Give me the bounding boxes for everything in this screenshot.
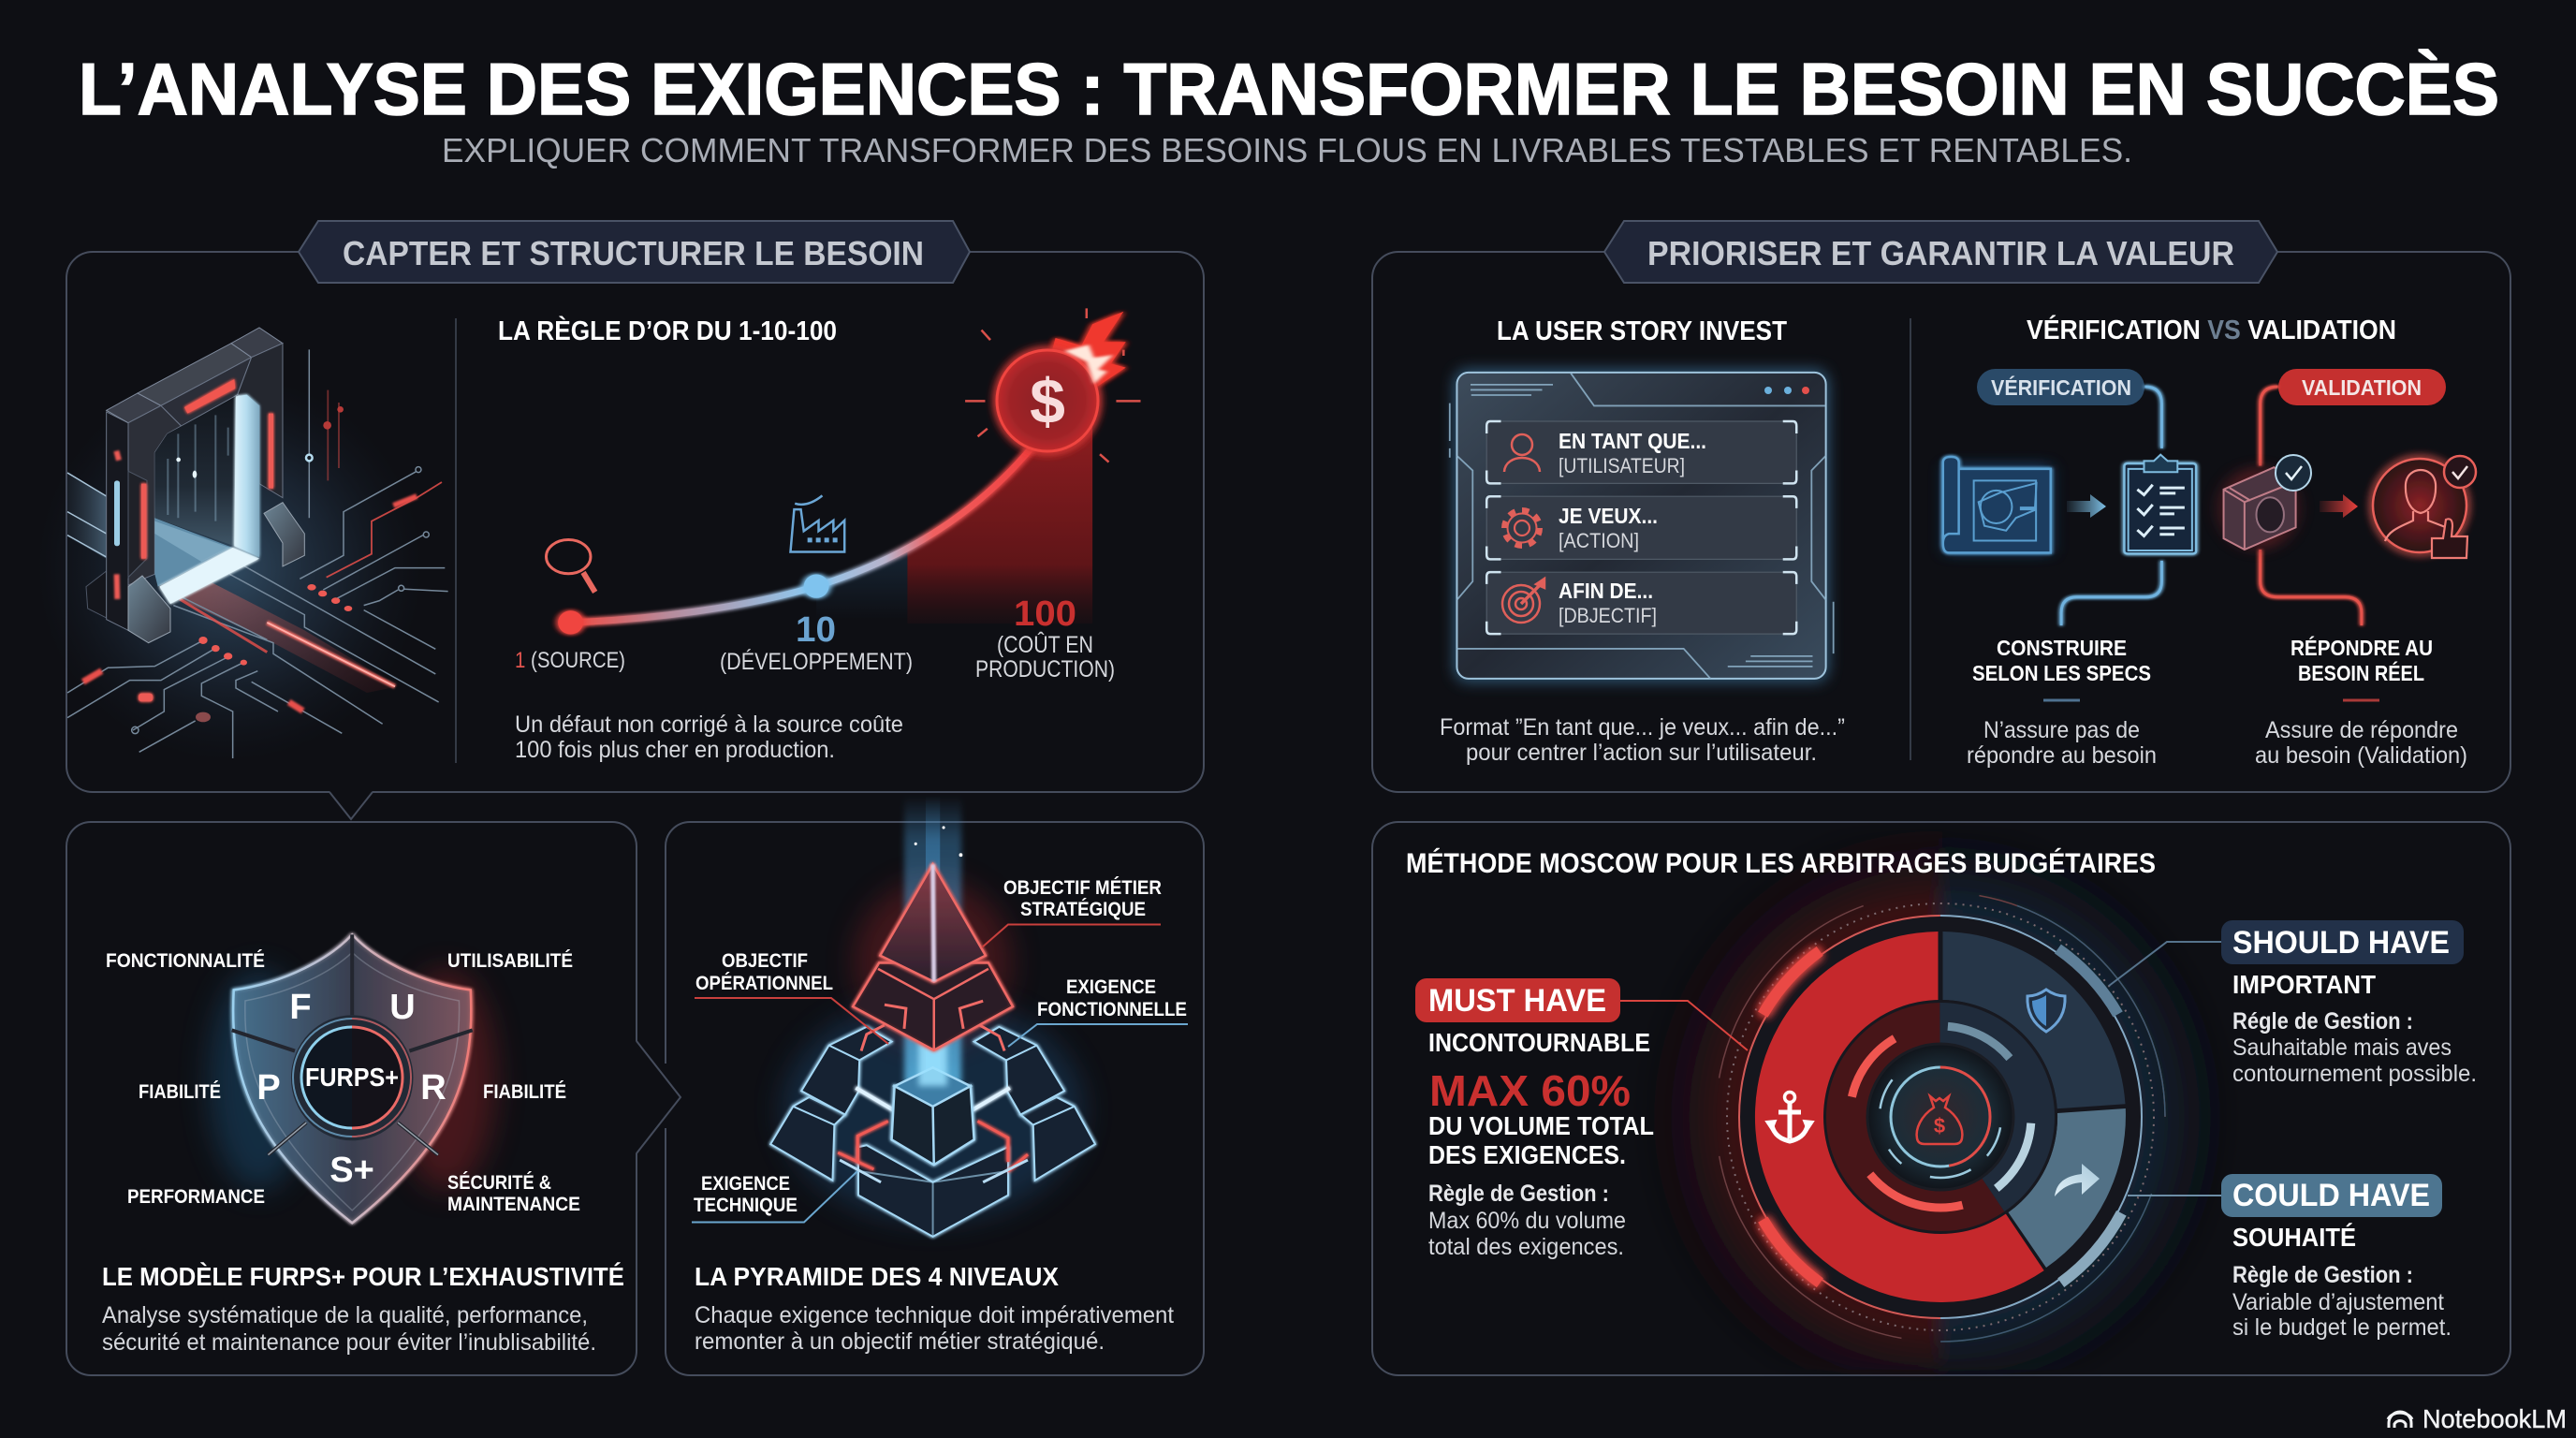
text block: user story caption: Format ”En tant que... je veux... afin de...” [1440,714,1845,741]
label: 100 cout en production [975,594,1115,682]
block: could have [2128,1174,2452,1341]
text: n'assure pas: N’assure pas de [1983,717,2140,743]
panel frame [666,822,1204,1375]
text: construire selon les specs [1972,636,2151,700]
pill: MUST HAVE [1428,983,1606,1019]
label: objectif metier strategique: STRATÉGIQUE [1020,899,1146,920]
shield letters [256,988,446,1190]
big number: MAX 60% [1429,1066,1631,1115]
text block: pyramid description: remonter à un objectif métier stratégiqué. [695,1328,1105,1355]
panel frame [1372,822,2510,1375]
icon: dollar coin explosion [965,308,1141,462]
labels: FURPS categories: UTILISABILITÉ [447,950,573,972]
heading: verification vs validation: VÉRIFICATION VS VALIDATION [2027,314,2396,345]
icon: user [1504,434,1540,472]
row text: en tant que: [UTILISATEUR] [1559,454,1685,477]
text: assure de repondre [2255,717,2467,769]
text block: FURPS description: Analyse systématique de la qualité, performance, [102,1302,588,1328]
segment: should have [1943,932,2125,1108]
illustration: futuristic gate and circuits [37,328,448,761]
outer decorative rings [1716,892,2165,1342]
logo: NotebookLM: NotebookLM [2422,1404,2567,1433]
panel: capter et structurer le besoin [37,221,1204,819]
text: regle: Sauhaitable mais aves [2232,1034,2452,1061]
column: validation [2218,369,2476,769]
labels: FURPS categories: MAINTENANCE [447,1194,580,1215]
shield letters: P [256,1068,281,1108]
halo [1632,829,2243,1370]
text block: FURPS description: sécurité et maintenance pour éviter l’inublisabilité. [102,1329,596,1356]
thumb up [2432,519,2467,558]
block: must have [1415,978,1748,1260]
window dots [1764,387,1809,394]
panel: modele FURPS+ [66,822,681,1375]
text: regle: Régle de Gestion : [2232,1008,2413,1034]
block: should have [2109,920,2477,1087]
label: important: IMPORTANT [2232,970,2376,999]
labels: FURPS categories: SÉCURITÉ & [447,1172,551,1194]
vertical divider [455,318,457,763]
label: exigence fonctionnelle: EXIGENCE [1066,976,1156,998]
title: L’ANALYSE DES EXIGENCES : TRANSFORMER LE BESOIN EN SUCCÈS [79,48,2499,130]
text: n'assure pas: répondre au besoin [1967,742,2157,769]
text block: defect explanation: 100 fois plus cher en production. [515,737,835,763]
heading: pyramide: LA PYRAMIDE DES 4 NIVEAUX [695,1262,1059,1291]
row text: afin de: AFIN DE... [1559,579,1653,603]
section badge: CAPTER ET STRUCTURER LE BESOIN [343,234,924,272]
text block: pyramid description [695,1302,1174,1355]
text: volume total [1428,1111,1654,1169]
row text: je veux: JE VEUX... [1559,504,1658,528]
icon: target [1502,579,1544,623]
labels: FURPS categories: PERFORMANCE [127,1186,265,1208]
icon: blueprint [1943,457,2052,554]
shield letters: FURPS+ [305,1063,399,1092]
column: verification [1943,369,2196,769]
text: repondre au besoin reel: RÉPONDRE AU [2291,635,2433,660]
labels: FURPS categories: FONCTIONNALITÉ [106,950,265,972]
chart: FURPS shield [209,934,495,1223]
segment: could have [2009,1108,2126,1268]
arrow: pointer toward lower panels [329,791,373,819]
heading: FURPS: LE MODÈLE FURPS+ POUR L’EXHAUSTIVITÉ [102,1262,624,1291]
label: exigence fonctionnelle [1008,976,1188,1047]
panel frame [66,822,637,1375]
icon: product cube [2218,467,2298,550]
inner hub [1823,1000,2057,1234]
text: regle de gestion: Max 60% du volume [1428,1208,1626,1234]
icon: dollar coin explosion: $ [1030,366,1065,437]
text block: FURPS description [102,1302,596,1356]
segment: must have 60% [1755,932,2044,1302]
icon: magnifier [547,540,595,592]
heading: la regle d'or: LA RÈGLE D’OR DU 1-10-100 [498,315,837,346]
text block: defect explanation: Un défaut non corrigé à la source coûte [515,712,903,738]
label: objectif operationnel: OBJECTIF [722,950,808,972]
text block: pyramid description: Chaque exigence technique doit impérativement [695,1302,1174,1328]
text: regle: Variable d’ajustement [2232,1289,2444,1315]
connector line [1620,1001,1748,1050]
text: regle: Règle de Gestion : [2232,1262,2413,1288]
label: incontournable: INCONTOURNABLE [1428,1028,1650,1057]
panel frame [1372,252,2510,792]
labels: FURPS categories: FIABILITÉ [139,1081,221,1103]
text: regle [2232,1262,2452,1341]
label: objectif operationnel: OPÉRATIONNEL [695,973,833,994]
label: exigence technique [692,1171,857,1223]
pill: validation [2278,369,2446,405]
icon: shield [2027,990,2065,1032]
text: assure de repondre: Assure de répondre [2265,717,2458,743]
shield letters: U [389,988,416,1027]
section badge [1604,221,2277,283]
text block: user story caption: pour centrer l’action sur l’utilisateur. [1466,740,1817,766]
pill: SHOULD HAVE [2232,925,2450,961]
row text: je veux: [ACTION] [1559,529,1639,552]
text: regle de gestion: Règle de Gestion : [1428,1181,1609,1207]
icon: arrow [2055,1164,2100,1196]
label: 1 source: 1 (SOURCE) [515,648,625,673]
text: repondre au besoin reel: BESOIN RÉEL [2298,660,2424,685]
text block: defect explanation [515,712,903,763]
label: exigence technique: EXIGENCE [701,1173,790,1195]
label: objectif metier strategique [982,877,1162,947]
connectors [2261,387,2362,625]
shield letters: S+ [329,1151,374,1190]
text: volume total: DES EXIGENCES. [1428,1140,1626,1169]
arrow: blueprint to checklist [2067,494,2106,518]
label: objectif metier strategique: OBJECTIF MÉTIER [1003,877,1162,899]
text: regle: contournement possible. [2232,1061,2477,1087]
label: souhaite: SOUHAITÉ [2232,1223,2356,1252]
icon: factory [790,495,844,552]
section badge: PRIORISER ET GARANTIR LA VALEUR [1647,234,2234,272]
text: regle [2232,1008,2477,1087]
text: construire selon les specs: SELON LES SPECS [1972,661,2151,685]
label: 10 developpement: (DÉVELOPPEMENT) [720,648,913,675]
text: repondre au besoin reel [2291,635,2433,700]
text: regle: si le budget le permet. [2232,1314,2452,1341]
chart: isometric pyramid [770,796,1095,1237]
panel frame [66,252,1204,792]
shield letters: F [289,988,312,1027]
label: 100 cout en production: PRODUCTION) [975,656,1115,682]
icon: gear [1504,510,1540,546]
label: 100 cout en production: 100 [1014,594,1076,634]
label: exigence fonctionnelle: FONCTIONNELLE [1037,999,1187,1020]
arrow: cube to client [2320,494,2358,518]
vertical divider [1910,318,1911,760]
text: n'assure pas [1967,717,2157,769]
labels: FURPS categories [106,950,580,1215]
panel: prioriser et garantir la valeur [1372,221,2510,792]
chart: MoSCoW donut [1632,829,2243,1370]
label: 100 cout en production: (COÛT EN [997,631,1093,658]
shield letters: R [420,1068,446,1108]
icon: checklist [2124,455,2196,553]
icon: check badge on cube [2276,455,2311,491]
icon: money bag [1917,1096,1962,1144]
row text: afin de: [DBJECTIF] [1559,604,1657,627]
connectors [2061,387,2161,625]
icon: satisfied client [2373,456,2476,558]
icon: anchor [1766,1092,1813,1141]
text: regle de gestion [1428,1181,1626,1260]
connector line [2128,1195,2221,1196]
section badge [299,221,970,283]
labels: FURPS categories: FIABILITÉ [483,1081,566,1103]
pill: verification: VÉRIFICATION [1991,374,2131,400]
chart: cost curve 1-10-100 [558,427,1092,635]
heading: user story: LA USER STORY INVEST [1497,316,1787,346]
panel: pyramide des 4 niveaux [666,796,1204,1375]
pill: COULD HAVE [2232,1178,2430,1213]
card: user story window [1450,370,1834,682]
label: objectif operationnel [695,950,888,1044]
arrow: pointer toward pyramid [636,1041,681,1153]
label: 10 developpement [720,610,913,675]
text: volume total: DU VOLUME TOTAL [1428,1111,1654,1140]
row text: afin de [1559,579,1657,627]
text: regle de gestion: total des exigences. [1428,1234,1624,1260]
panel: methode MoSCoW [1372,822,2510,1375]
pill: validation: VALIDATION [2302,375,2422,400]
pill: verification [1977,369,2144,405]
text block: user story caption [1440,714,1845,766]
row text: je veux [1559,504,1658,552]
text: assure de repondre: au besoin (Validation) [2255,742,2467,769]
label: exigence technique: TECHNIQUE [694,1195,798,1216]
heading: moscow: MÉTHODE MOSCOW POUR LES ARBITRAGES BUDGÉTAIRES [1406,847,2156,879]
row text: en tant que: EN TANT QUE... [1559,429,1706,453]
text: construire selon les specs: CONSTRUIRE [1997,636,2127,660]
label: 10 developpement: 10 [796,610,836,650]
row text: en tant que [1559,429,1706,477]
icon: money bag: $ [1934,1114,1945,1137]
connector line [2109,942,2221,986]
subtitle: EXPLIQUER COMMENT TRANSFORMER DES BESOINS FLOUS EN LIVRABLES TESTABLES ET RENTABLES. [442,131,2132,169]
